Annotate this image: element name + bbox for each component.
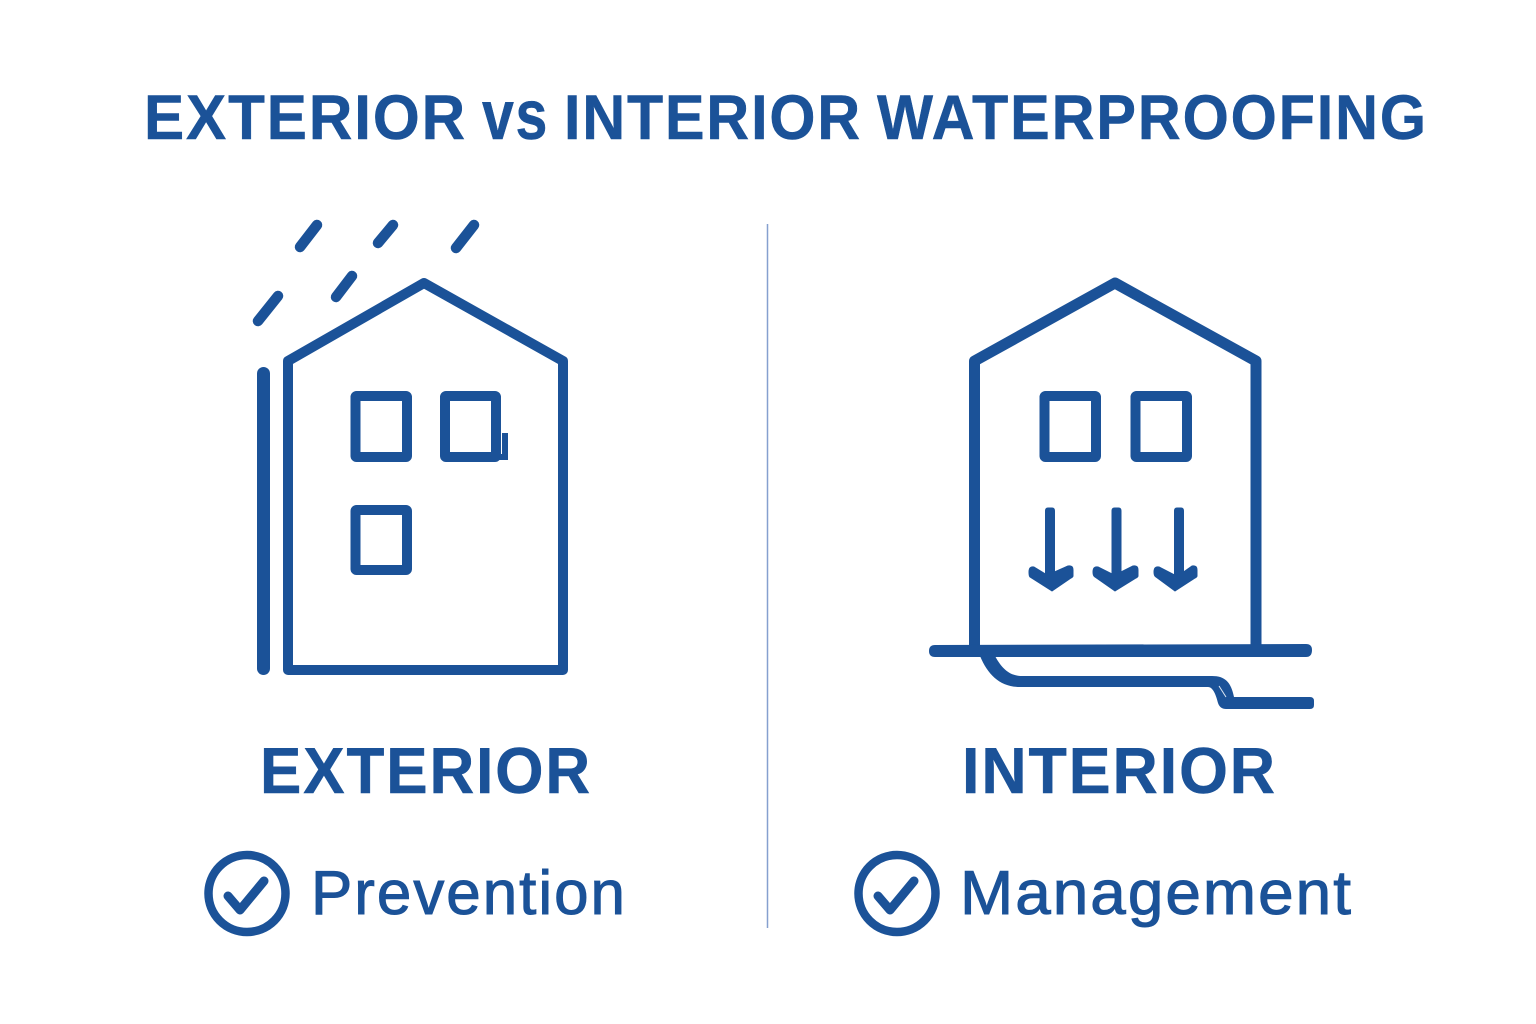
divider xyxy=(766,224,768,928)
heading: exterior: EXTERIOR xyxy=(260,734,592,807)
panel: exterior xyxy=(208,225,627,932)
icon: exterior house xyxy=(264,283,563,670)
icon: check xyxy=(208,855,286,932)
label: prevention: Prevention xyxy=(311,859,627,928)
icon: down arrows xyxy=(1029,508,1197,591)
label: management: Management xyxy=(960,859,1353,928)
title: WATERPROOFING xyxy=(877,83,1428,153)
title: INTERIOR xyxy=(564,83,862,153)
panel: interior xyxy=(858,283,1353,932)
icon: check xyxy=(858,855,936,932)
icon: ground and drain xyxy=(929,644,1314,709)
title: EXTERIOR xyxy=(144,83,467,153)
icon: rain xyxy=(258,225,474,321)
title: vs xyxy=(482,76,549,154)
title xyxy=(144,76,1428,154)
heading: interior: INTERIOR xyxy=(962,734,1277,807)
icon: interior house xyxy=(974,283,1256,650)
